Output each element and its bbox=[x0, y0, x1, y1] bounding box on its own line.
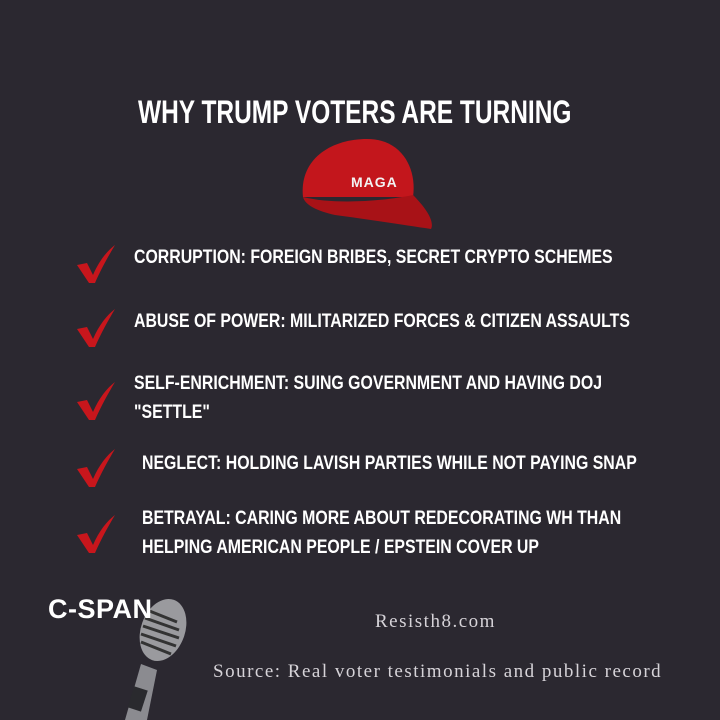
item 3: "SETTLE" bbox=[134, 402, 210, 423]
source: Source: Real voter testimonials and public record bbox=[213, 661, 662, 682]
logo: C-SPAN: C-SPAN bbox=[48, 594, 153, 624]
icon: check 1 bbox=[77, 245, 115, 283]
icon: check 3 bbox=[77, 382, 115, 420]
icon: check 5 bbox=[77, 515, 115, 553]
icon: MAGA hat bbox=[302, 139, 432, 229]
item 5: HELPING AMERICAN PEOPLE / EPSTEIN COVER UP bbox=[142, 537, 539, 558]
title: WHY TRUMP VOTERS ARE TURNING bbox=[138, 94, 571, 130]
item 3: SELF-ENRICHMENT: SUING GOVERNMENT AND HAVING DOJ bbox=[134, 373, 602, 394]
icon: MAGA hat: MAGA bbox=[351, 174, 398, 190]
item 5 bbox=[142, 508, 621, 558]
checklist bbox=[77, 245, 637, 558]
website: Resisth8.com bbox=[375, 611, 496, 632]
icon: check 2 bbox=[77, 309, 115, 347]
item 2: ABUSE OF POWER: MILITARIZED FORCES & CITIZEN ASSAULTS bbox=[134, 311, 630, 332]
icon: microphone bbox=[125, 599, 186, 720]
icon: check 4 bbox=[77, 449, 115, 487]
item 3 bbox=[134, 373, 602, 423]
item 1: CORRUPTION: FOREIGN BRIBES, SECRET CRYPTO SCHEMES bbox=[134, 247, 613, 268]
item 4: NEGLECT: HOLDING LAVISH PARTIES WHILE NOT PAYING SNAP bbox=[142, 453, 637, 474]
item 5: BETRAYAL: CARING MORE ABOUT REDECORATING WH THAN bbox=[142, 508, 621, 529]
